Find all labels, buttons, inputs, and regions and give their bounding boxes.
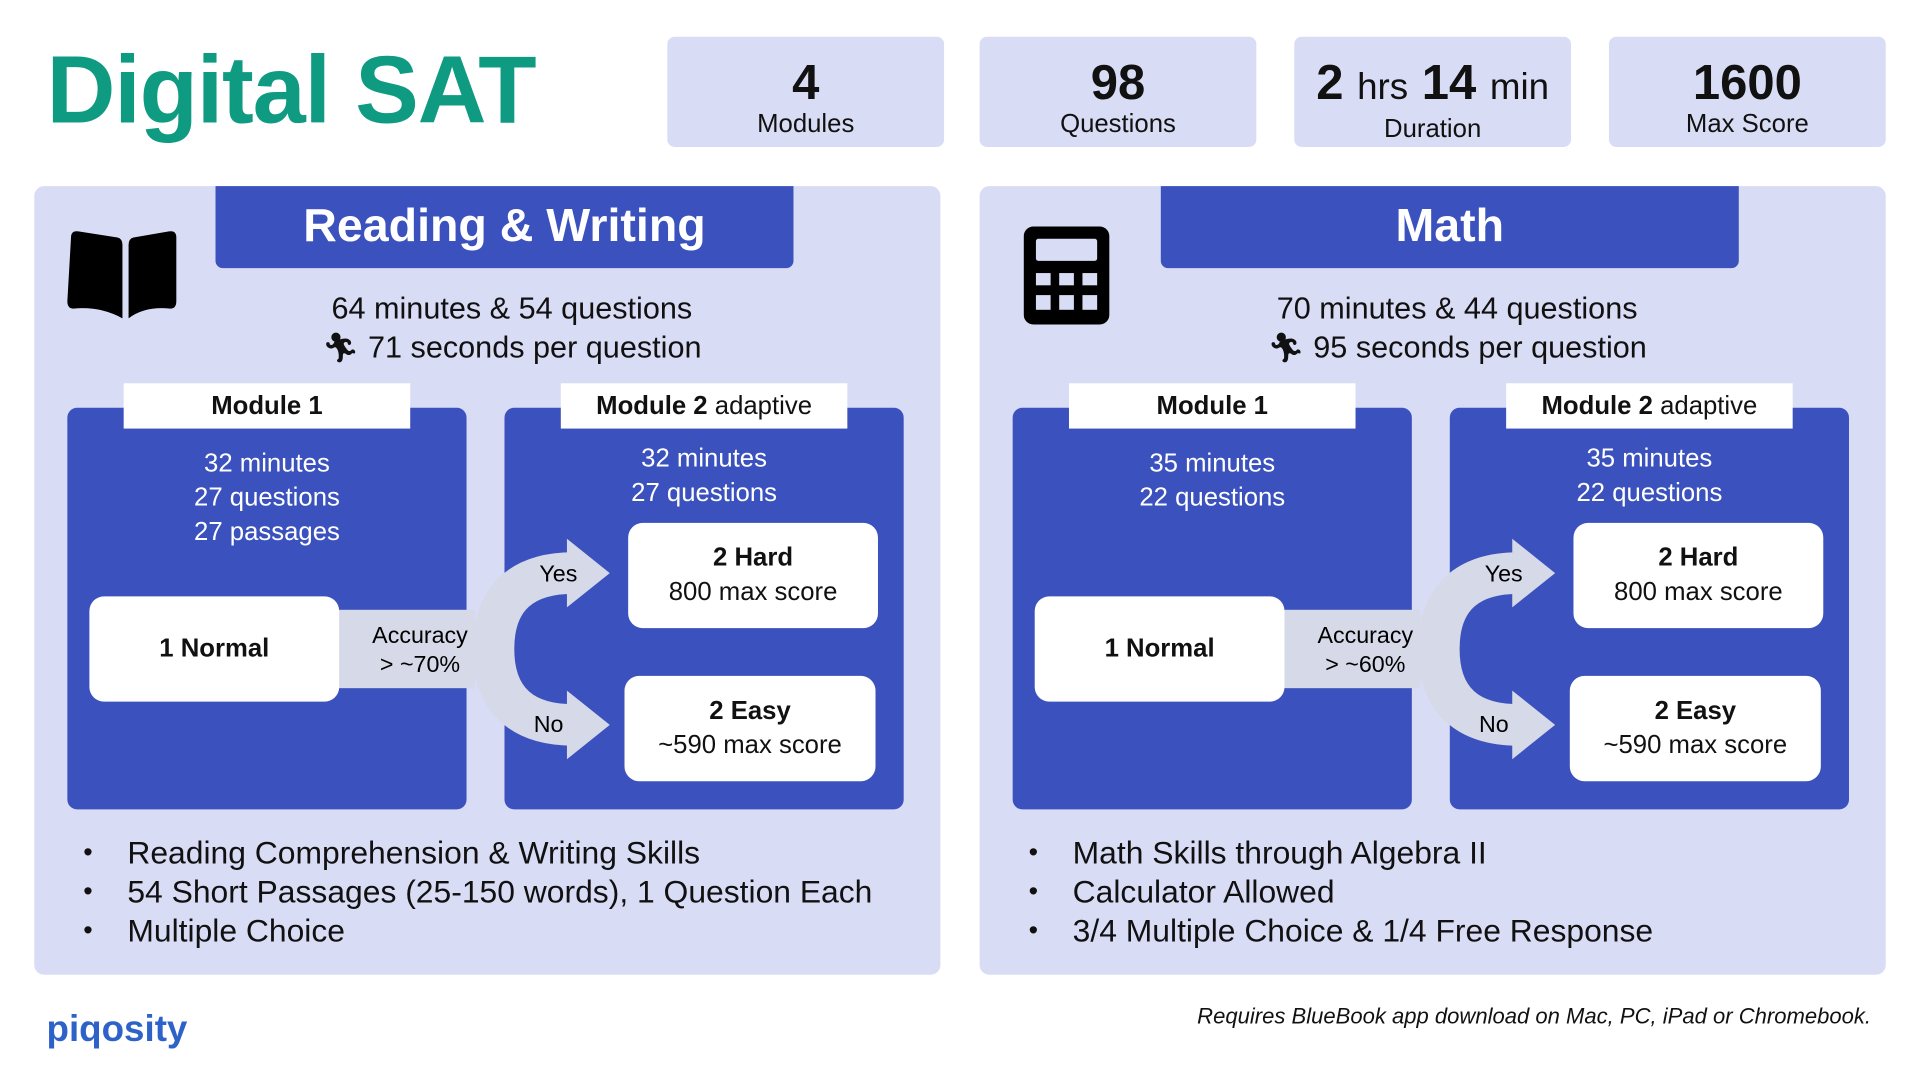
stat: modules	[667, 37, 944, 147]
box: hard: 800 max score	[1614, 578, 1783, 606]
summary text	[1267, 291, 1647, 365]
bullets	[1030, 834, 1653, 949]
module 2: 27 questions	[631, 479, 777, 507]
box: easy: 2 Easy	[709, 697, 791, 725]
bullets: 54 Short Passages (25-150 words), 1 Question Each	[127, 873, 872, 910]
heading	[1161, 186, 1739, 268]
summary text: 🏃︎ 71 seconds per question	[322, 331, 702, 365]
box: normal	[89, 596, 339, 702]
module 1: 27 questions	[194, 484, 340, 512]
stat: duration: Duration	[1384, 115, 1481, 143]
summary text: 64 minutes & 54 questions	[331, 291, 692, 326]
stat: modules: Modules	[757, 110, 854, 138]
summary text: 70 minutes & 44 questions	[1277, 291, 1638, 326]
arrow: accuracy fork	[1284, 538, 1555, 760]
stat: questions: Questions	[1060, 110, 1176, 138]
arrow: accuracy fork: > ~60%	[1325, 651, 1405, 677]
box: easy: ~590 max score	[658, 731, 842, 759]
stat: duration: 2 hrs 14 min	[1316, 56, 1549, 110]
summary text	[322, 291, 702, 365]
module 1: 27 passages	[194, 518, 340, 546]
icon: book	[67, 231, 176, 318]
box: hard: 2 Hard	[1658, 544, 1738, 572]
stat: questions	[980, 37, 1256, 147]
box: easy	[1570, 676, 1821, 781]
tab: module 2	[561, 383, 847, 429]
stat: duration	[1294, 37, 1571, 147]
arrow: accuracy fork: Accuracy	[1318, 622, 1413, 648]
box: easy	[624, 676, 876, 781]
arrow: accuracy fork	[339, 538, 610, 760]
heading: Math	[1396, 201, 1504, 252]
module 2	[504, 408, 904, 809]
box: hard	[628, 523, 878, 628]
arrow: accuracy fork: > ~70%	[380, 651, 460, 677]
arrow: accuracy fork: No	[1479, 711, 1509, 737]
panel: math	[980, 186, 1886, 975]
bullets: Multiple Choice	[127, 912, 345, 949]
bullets: Calculator Allowed	[1073, 873, 1335, 910]
stat: max score: 1600	[1693, 56, 1802, 110]
box: easy: ~590 max score	[1603, 731, 1787, 759]
bullets: Reading Comprehension & Writing Skills	[127, 834, 700, 871]
title: Digital SAT	[47, 36, 535, 143]
arrow: accuracy fork: No	[534, 711, 563, 737]
box: normal: 1 Normal	[159, 634, 269, 662]
tab: module 1	[1069, 383, 1356, 429]
bullets: 3/4 Multiple Choice & 1/4 Free Response	[1073, 912, 1653, 949]
module 2: 22 questions	[1576, 479, 1722, 507]
module 1	[1013, 408, 1412, 809]
tab: module 2: Module 2 adaptive	[1541, 392, 1757, 420]
tab: module 2: Module 2 adaptive	[596, 392, 812, 420]
tab: module 2	[1506, 383, 1793, 429]
heading	[216, 186, 793, 268]
box: hard: 800 max score	[669, 578, 837, 606]
bullets: Math Skills through Algebra II	[1073, 834, 1487, 871]
tab: module 1: Module 1	[211, 392, 323, 420]
module 2	[1450, 408, 1849, 809]
arrow: accuracy fork: Accuracy	[372, 622, 468, 648]
box: hard: 2 Hard	[713, 544, 793, 572]
box: easy: 2 Easy	[1655, 697, 1736, 725]
module 1: 35 minutes	[1149, 449, 1275, 478]
box: hard	[1573, 523, 1823, 628]
icon: calculator	[1024, 226, 1110, 324]
module 2: 32 minutes	[641, 444, 767, 473]
module 1	[67, 408, 467, 809]
stat: modules: 4	[792, 56, 819, 110]
stat: questions: 98	[1091, 56, 1145, 110]
arrow: accuracy fork: Yes	[1485, 561, 1523, 587]
footnote: Requires BlueBook app download on Mac, PC, iPad or Chromebook.	[1197, 1004, 1871, 1029]
stat: max score: Max Score	[1686, 110, 1809, 138]
module 2: 35 minutes	[1586, 444, 1712, 473]
stat: max score	[1609, 37, 1886, 147]
heading: Reading & Writing	[303, 201, 706, 252]
summary text: 🏃︎ 95 seconds per question	[1267, 331, 1647, 365]
box: normal: 1 Normal	[1105, 634, 1215, 662]
module 1: 32 minutes	[204, 449, 330, 478]
arrow: accuracy fork: Yes	[539, 561, 577, 587]
tab: module 1: Module 1	[1157, 392, 1268, 420]
tab: module 1	[124, 383, 410, 429]
panel: reading & writing	[34, 186, 940, 975]
logo: piqosity	[47, 1009, 187, 1049]
module 1: 22 questions	[1139, 484, 1285, 512]
bullets	[84, 834, 872, 949]
box: normal	[1035, 596, 1285, 702]
